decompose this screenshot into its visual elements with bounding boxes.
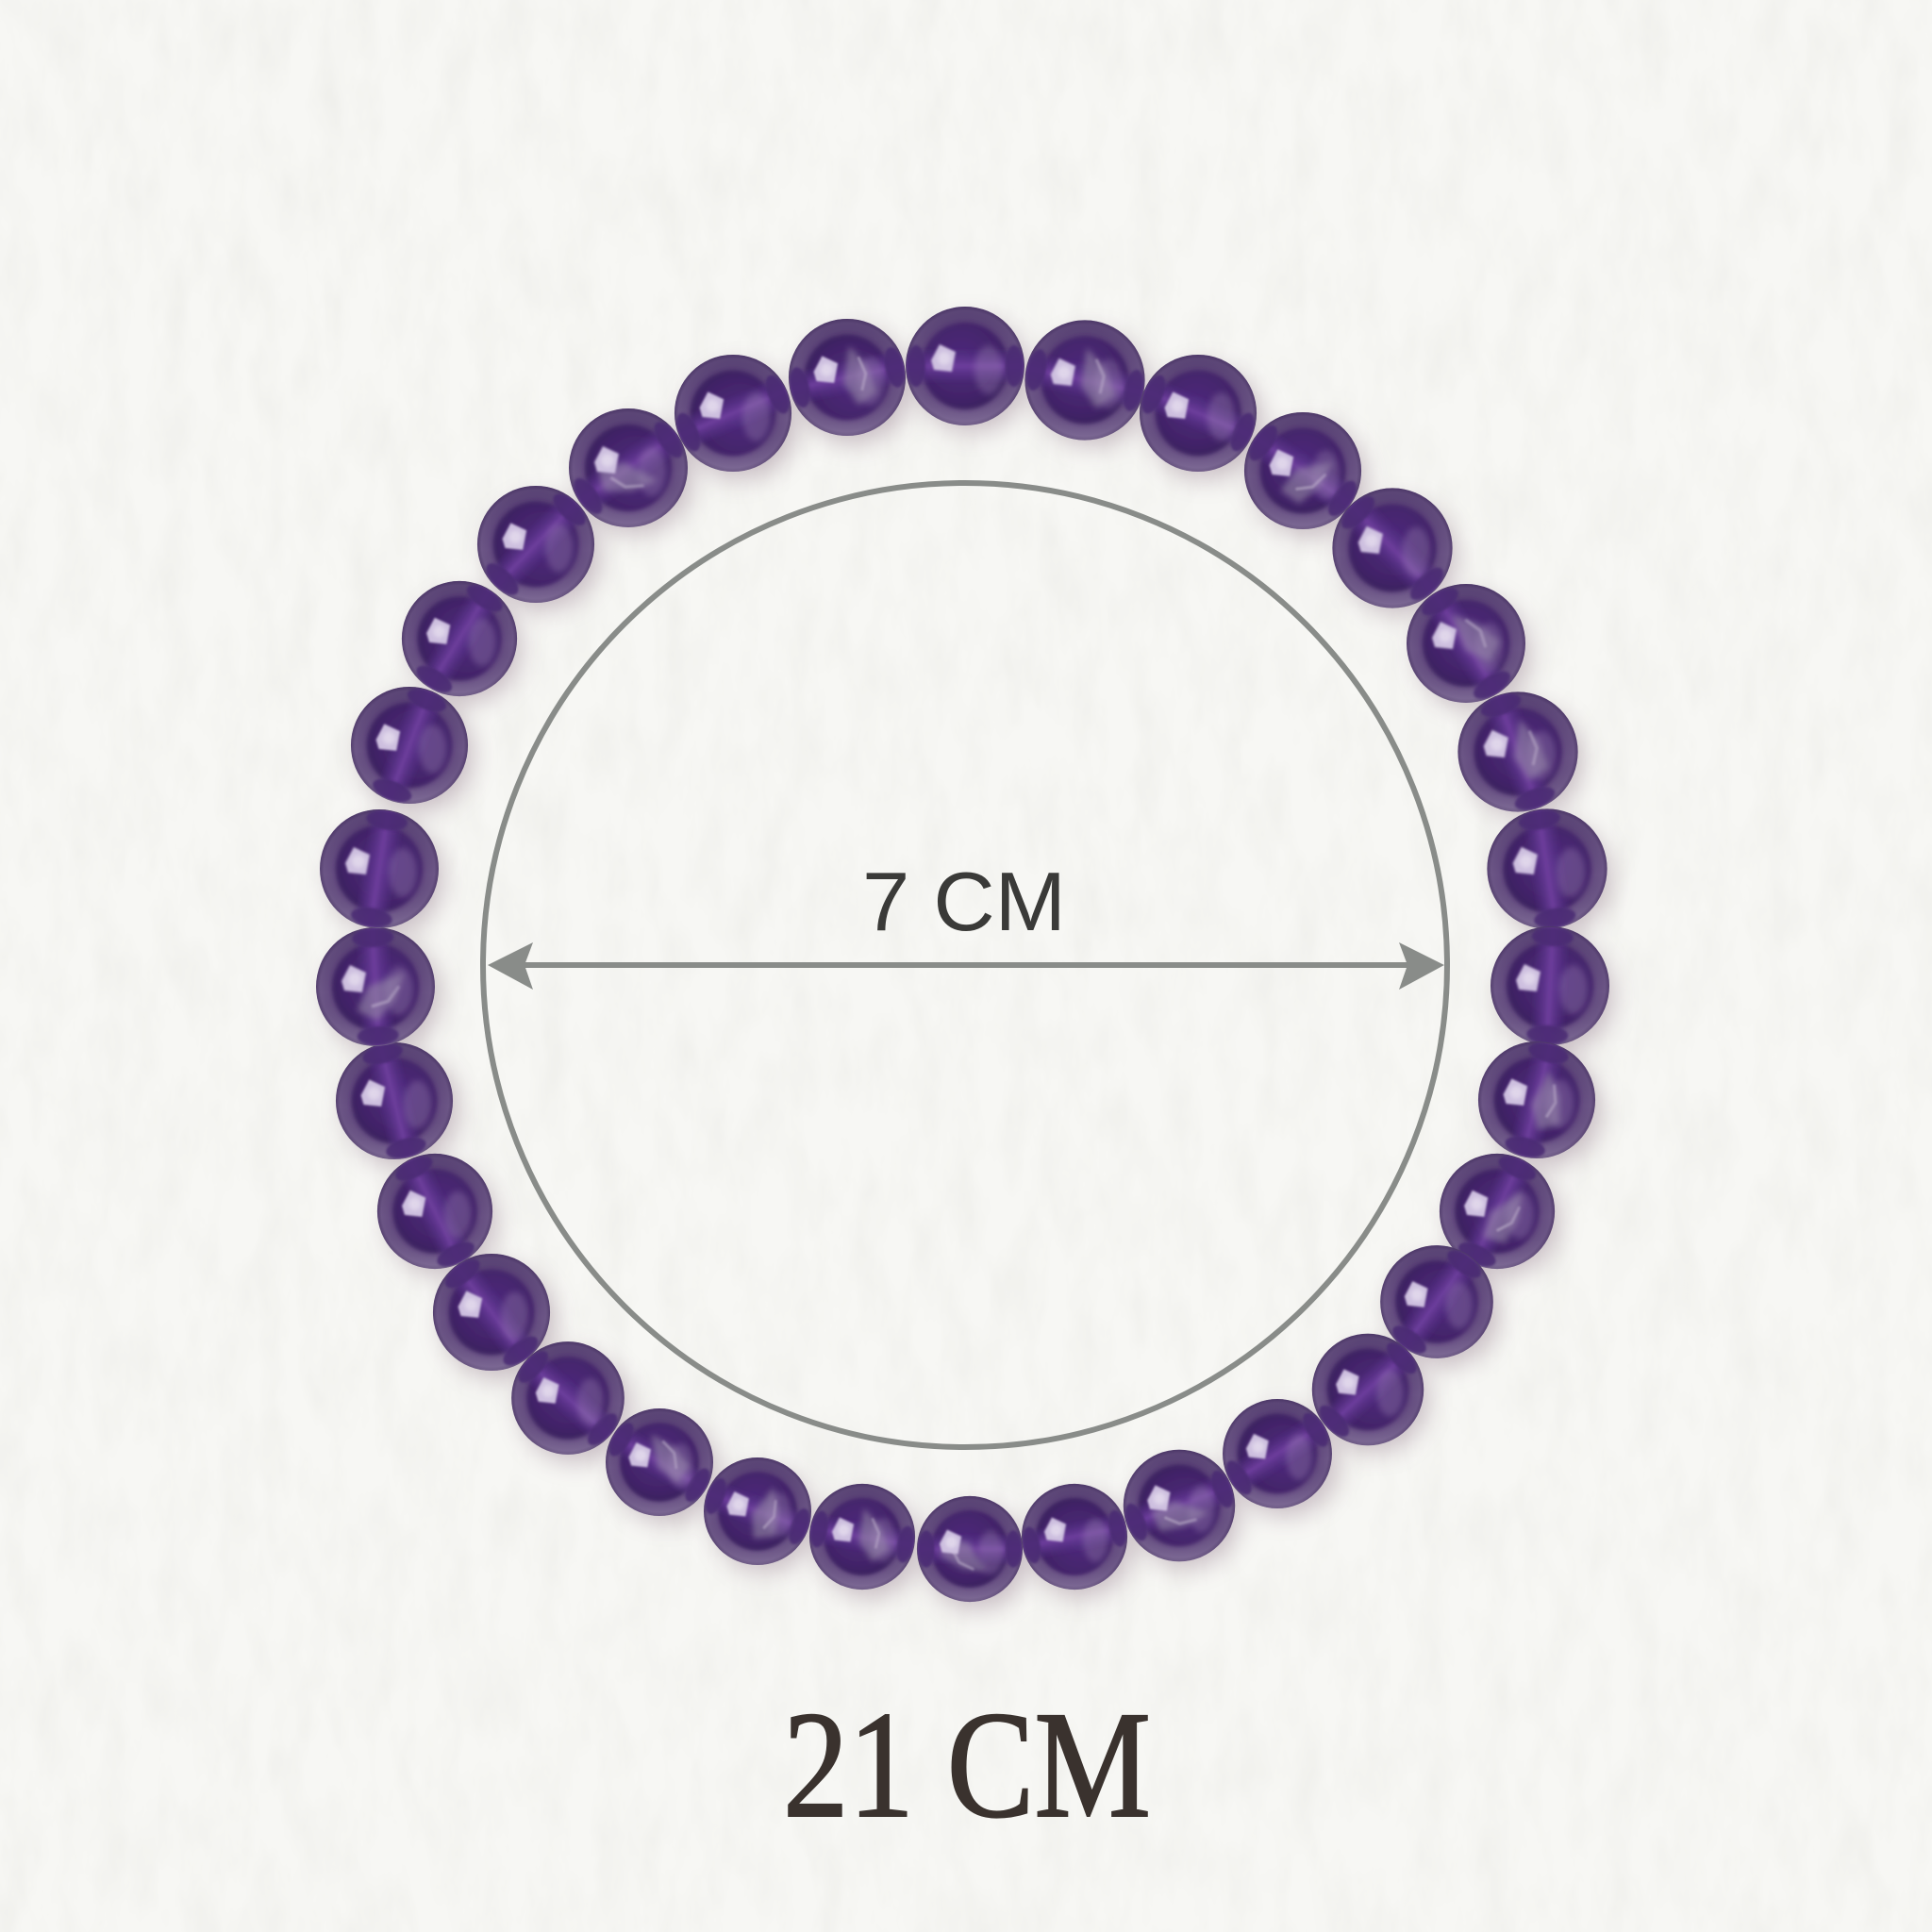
bead 11: [1435, 1141, 1559, 1281]
bead 17: [917, 1496, 1023, 1602]
amethyst bead bracelet: [316, 307, 1609, 1602]
bead 21: [498, 1329, 638, 1467]
bead 10: [1478, 1033, 1595, 1167]
bead 23: [372, 1141, 498, 1281]
bead 4: [1230, 402, 1375, 540]
bead 30: [555, 398, 702, 538]
bead 14: [1209, 1391, 1345, 1517]
inner diameter circle: [483, 483, 1447, 1447]
bead 26: [320, 804, 439, 934]
circumference label: 21 CM: [783, 1681, 1151, 1850]
bead 16: [1015, 1484, 1134, 1590]
bead 29: [464, 473, 608, 616]
bead shadows: [326, 319, 1614, 1609]
bead 1: [906, 307, 1024, 425]
bead 5: [1319, 475, 1466, 622]
bead 19: [693, 1456, 822, 1567]
bead 9: [1491, 924, 1609, 1047]
bead 20: [593, 1401, 725, 1524]
bead 12: [1370, 1232, 1504, 1372]
bead 25: [316, 925, 435, 1048]
bead 28: [393, 568, 525, 709]
diameter label: 7 CM: [862, 855, 1066, 948]
bead 8: [1487, 803, 1607, 935]
bead 15: [1112, 1447, 1246, 1564]
bead 32: [781, 319, 913, 436]
bead 6: [1398, 570, 1534, 717]
bead 7: [1457, 680, 1579, 824]
bead 2: [1017, 320, 1153, 441]
bead 22: [422, 1240, 561, 1385]
bead 18: [804, 1484, 921, 1590]
bead 3: [1127, 351, 1269, 475]
bead 13: [1299, 1322, 1437, 1457]
bead 31: [662, 351, 804, 475]
bead 27: [348, 675, 471, 815]
bead 24: [336, 1034, 453, 1168]
diameter double arrow: [488, 942, 1444, 990]
